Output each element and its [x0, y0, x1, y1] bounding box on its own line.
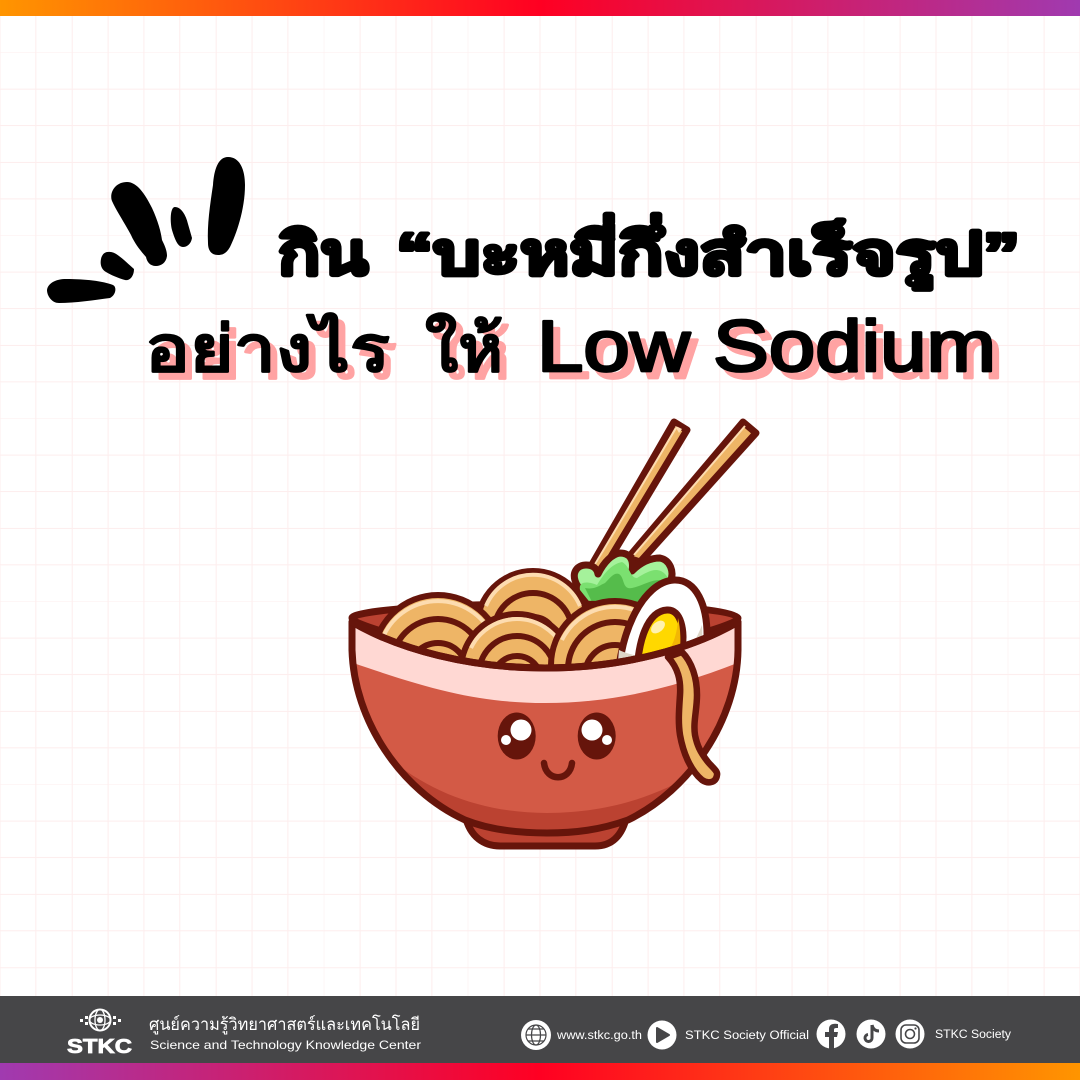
hanging noodle strand: [668, 652, 717, 782]
bowl front rim line: [352, 622, 738, 668]
organisation name Thai: ศูนย์ความรู้วิทยาศาสตร์และเทคโนโลยี: [149, 1014, 420, 1035]
bowl shadow: [404, 770, 671, 830]
title line 1: “บะหมี่กึ่งสำเร็จรูป”: [396, 213, 1020, 290]
noodle pile: left: [378, 592, 491, 656]
title line 1: [278, 213, 1020, 290]
noodle pile: back: [480, 568, 584, 628]
title line 2: Low Sodium: [537, 307, 996, 387]
icon: facebook: [816, 1020, 846, 1049]
boiled egg: [616, 576, 710, 659]
logo mark: [80, 1010, 121, 1030]
title line 2 shadow: ให้: [432, 320, 510, 392]
icon: instagram: [896, 1020, 924, 1048]
bowl outline: [352, 622, 738, 833]
bowl body: [352, 622, 738, 833]
instagram name: STKC Society: [935, 1029, 1011, 1041]
footer organisation name: [149, 1014, 421, 1052]
bottom gradient bar: [0, 1063, 1080, 1080]
title: [145, 213, 1020, 394]
logo text: STKC: [67, 1036, 132, 1058]
title line 2: ให้: [425, 313, 503, 385]
title line 2 shadow: อย่างไร: [152, 320, 397, 392]
chopsticks: [590, 422, 756, 575]
title line 2 shadow: Low Sodium: [544, 314, 1003, 394]
noodle pile: right: [548, 598, 638, 664]
icon: globe: [521, 1020, 551, 1050]
icon: play: [648, 1020, 676, 1050]
organisation name English: Science and Technology Knowledge Center: [150, 1038, 421, 1052]
logo: STKC: [67, 1010, 132, 1058]
bowl back rim: [352, 604, 738, 668]
noodle pile: middle: [462, 611, 559, 664]
youtube name: STKC Society Official: [685, 1030, 809, 1042]
footer contacts: [521, 1020, 1011, 1050]
noodles: [378, 568, 710, 664]
footer bar: [0, 996, 1080, 1063]
illustration: noodle bowl: [345, 422, 756, 850]
icon: burst marks: [47, 157, 245, 303]
icon: tiktok: [856, 1020, 886, 1048]
website: www.stkc.go.th: [556, 1030, 642, 1042]
lettuce: [574, 553, 672, 612]
bowl foot: [465, 815, 627, 846]
bowl face: [498, 712, 616, 777]
bowl pink band: [356, 628, 734, 703]
title line 2: อย่างไร: [145, 313, 390, 385]
title line 2: [145, 307, 996, 387]
title line 1: กิน: [278, 222, 368, 287]
title line 2 shadow: [152, 314, 1003, 394]
top gradient bar: [0, 0, 1080, 16]
